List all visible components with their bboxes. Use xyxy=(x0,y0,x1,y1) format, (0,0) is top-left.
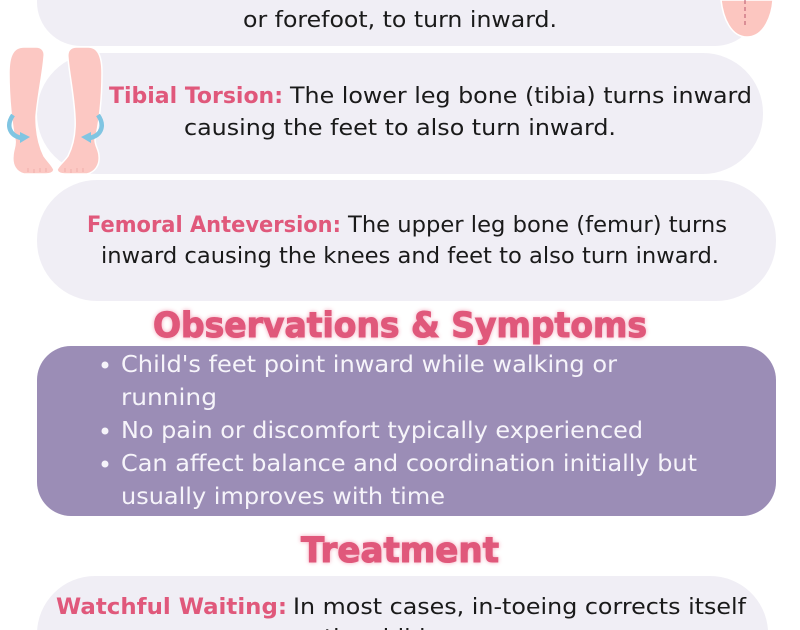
text: symptoms: usually improves with time xyxy=(121,484,445,510)
toe marks xyxy=(28,168,83,173)
icon: forefoot with dashed line xyxy=(721,0,773,37)
panel: femoral anteversion xyxy=(0,0,776,301)
bullet dots xyxy=(102,362,108,468)
icon: legs with inward rotation arrows xyxy=(9,47,102,174)
icon: right rotation arrow xyxy=(81,115,102,143)
text: watchful waiting description: Watchful Waiting: xyxy=(56,595,287,620)
text: femoral anteversion description: Femoral Anteversion: xyxy=(87,213,341,238)
panel: symptoms list xyxy=(0,0,776,516)
text: watchful waiting description: In most cases, in-toeing corrects itself xyxy=(293,595,747,620)
text: tibial torsion description: Tibial Torsion: xyxy=(109,84,283,109)
panel: tibial torsion xyxy=(0,0,763,174)
text: metatarsus description ending: or forefoot, to turn inward. xyxy=(243,8,557,33)
icon: left rotation arrow xyxy=(9,115,30,143)
text: symptoms: running xyxy=(121,385,217,411)
text: tibial torsion description: The lower leg bone (tibia) turns inward xyxy=(289,84,752,109)
heading: observations and symptoms: Observations & Symptoms xyxy=(153,306,647,346)
panel: metatarsus adductus (cropped) xyxy=(37,0,759,46)
text: femoral anteversion description: The upper leg bone (femur) turns xyxy=(347,213,727,238)
text: tibial torsion description: causing the feet to also turn inward. xyxy=(184,116,616,141)
heading: treatment: Treatment xyxy=(301,531,499,571)
text: symptoms: Can affect balance and coordination initially but xyxy=(121,451,697,477)
text: femoral anteversion description: inward causing the knees and feet to also turn inward. xyxy=(101,244,719,269)
text: symptoms: No pain or discomfort typically experienced xyxy=(121,418,643,444)
text: symptoms: Child's feet point inward while walking or xyxy=(121,352,618,378)
